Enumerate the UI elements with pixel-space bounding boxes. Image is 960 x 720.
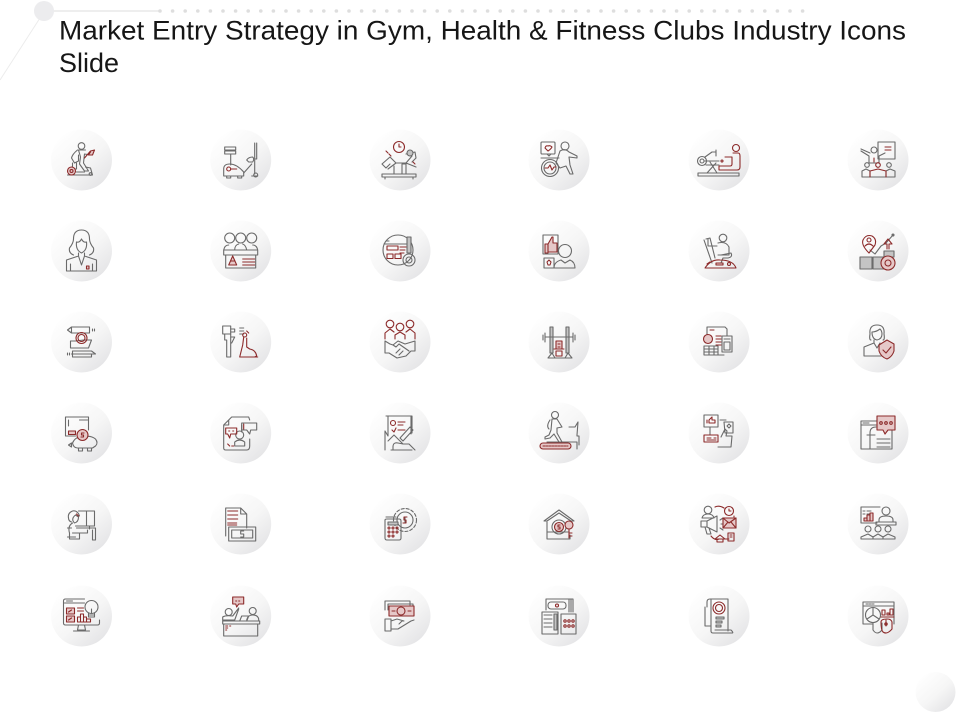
- icon: marketing cycle with megaphone: [688, 494, 750, 554]
- icon: analytics window with pie chart and mouse: [848, 586, 908, 646]
- icon: calculator with dollar gear: [370, 494, 430, 554]
- icon: financial scroll document: [688, 586, 750, 646]
- icon: document with banknote: [210, 494, 271, 554]
- icon: web page with gear: [370, 220, 430, 282]
- icon: thumbs up with customer: [528, 220, 590, 282]
- icon: team handshake: [370, 312, 430, 372]
- icon: woman with security shield: [848, 312, 908, 372]
- decorative header node and dotted rule: [0, 1, 804, 80]
- icon: patient walking with heart and pulse: [528, 130, 590, 190]
- decorative corner circle: [916, 672, 956, 712]
- icon: man on stepper machine: [688, 220, 750, 282]
- icon: presenter with audience: [848, 130, 908, 190]
- icon: woman at desk with window: [51, 494, 112, 554]
- icon: barbell squat rack: [528, 312, 590, 372]
- icon: monitor with charts and light bulb: [51, 586, 112, 646]
- icon: team behind a board with pyramid: [210, 220, 271, 282]
- icon: invoice with calculator: [688, 312, 750, 372]
- icon: social media page with f logo and chat: [848, 402, 908, 464]
- icon: elliptical trainer with arrow: [51, 130, 112, 190]
- icon: home, coins and key: [528, 494, 590, 554]
- icon: seated leg press machine: [688, 130, 750, 190]
- icon: person doing sit-ups with clock: [370, 130, 430, 190]
- icon: hands signing tablet: [370, 402, 430, 464]
- icon: coins, gear, growth line and location pin: [848, 220, 908, 282]
- icon: fitness coach and seated figure: [210, 312, 271, 372]
- title: Slide: [59, 48, 119, 78]
- icon: presenter with chart and audience: [848, 494, 908, 554]
- icon: dollar in hand with arrows: [51, 312, 112, 372]
- icon: cash register with keypad: [528, 586, 590, 646]
- icon: team at office desk with speech bubble: [210, 586, 271, 646]
- icon: piggy bank with safe: [51, 402, 112, 464]
- icon: exercise bike: [210, 130, 271, 190]
- title: [59, 16, 906, 78]
- title: Market Entry Strategy in Gym, Health & Fitness Clubs Industry Icons: [59, 16, 906, 46]
- icon: social likes and hearts with hand: [688, 402, 750, 464]
- icon: businesswoman: [51, 220, 112, 282]
- icon: hand holding banknotes: [370, 586, 430, 646]
- icon: runner on treadmill: [528, 402, 590, 464]
- icon: document with speech bubbles and user: [210, 402, 271, 464]
